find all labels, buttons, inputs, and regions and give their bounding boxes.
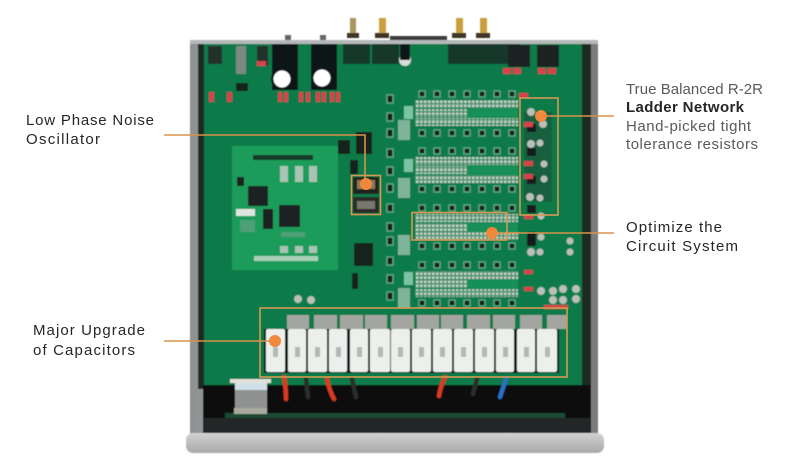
callout: low phase noise oscillator: Low Phase Noise xyxy=(26,112,154,129)
R-2R resistor arrays xyxy=(398,100,518,308)
callout: true balanced R-2R ladder network: Ladder Network xyxy=(626,99,745,116)
callout: optimize the circuit system: Optimize the xyxy=(626,219,722,236)
device photo: top-down view of the open chassis xyxy=(186,18,604,453)
callout: true balanced R-2R ladder network: Hand-picked tight xyxy=(626,118,752,135)
callout: major upgrade of capacitors: Major Upgrade xyxy=(33,322,145,339)
red terminals xyxy=(209,61,556,102)
callout: optimize the circuit system xyxy=(412,212,738,255)
callout: major upgrade of capacitors xyxy=(33,308,567,377)
XLR connectors with capacitors xyxy=(271,44,559,90)
rows of transistors xyxy=(387,91,515,306)
callout: true balanced R-2R ladder network: tolerance resistors xyxy=(626,136,758,153)
wires xyxy=(284,377,506,399)
callout: true balanced R-2R ladder network: True Balanced R-2R xyxy=(626,81,763,98)
rear connectors xyxy=(285,18,490,40)
low phase noise oscillator modules xyxy=(353,177,379,213)
callout: major upgrade of capacitors: of Capacitors xyxy=(33,342,135,359)
gray film capacitors xyxy=(287,315,567,329)
main circuit board xyxy=(204,44,582,385)
daughter board xyxy=(232,146,338,270)
ribbon cable xyxy=(230,379,271,414)
black tray at the front of the chassis xyxy=(203,385,591,433)
callout: low phase noise oscillator xyxy=(26,112,380,214)
output stage electrolytic capacitors xyxy=(294,108,580,309)
regulator chips upper left xyxy=(236,83,373,289)
callout: low phase noise oscillator: Oscillator xyxy=(26,131,100,148)
front panel xyxy=(186,433,604,453)
chassis walls xyxy=(190,40,598,435)
callout: optimize the circuit system: Circuit System xyxy=(626,238,738,255)
white capacitors xyxy=(264,329,559,373)
callout: true balanced R-2R ladder network xyxy=(520,81,763,215)
black rear connector housings xyxy=(208,44,501,74)
